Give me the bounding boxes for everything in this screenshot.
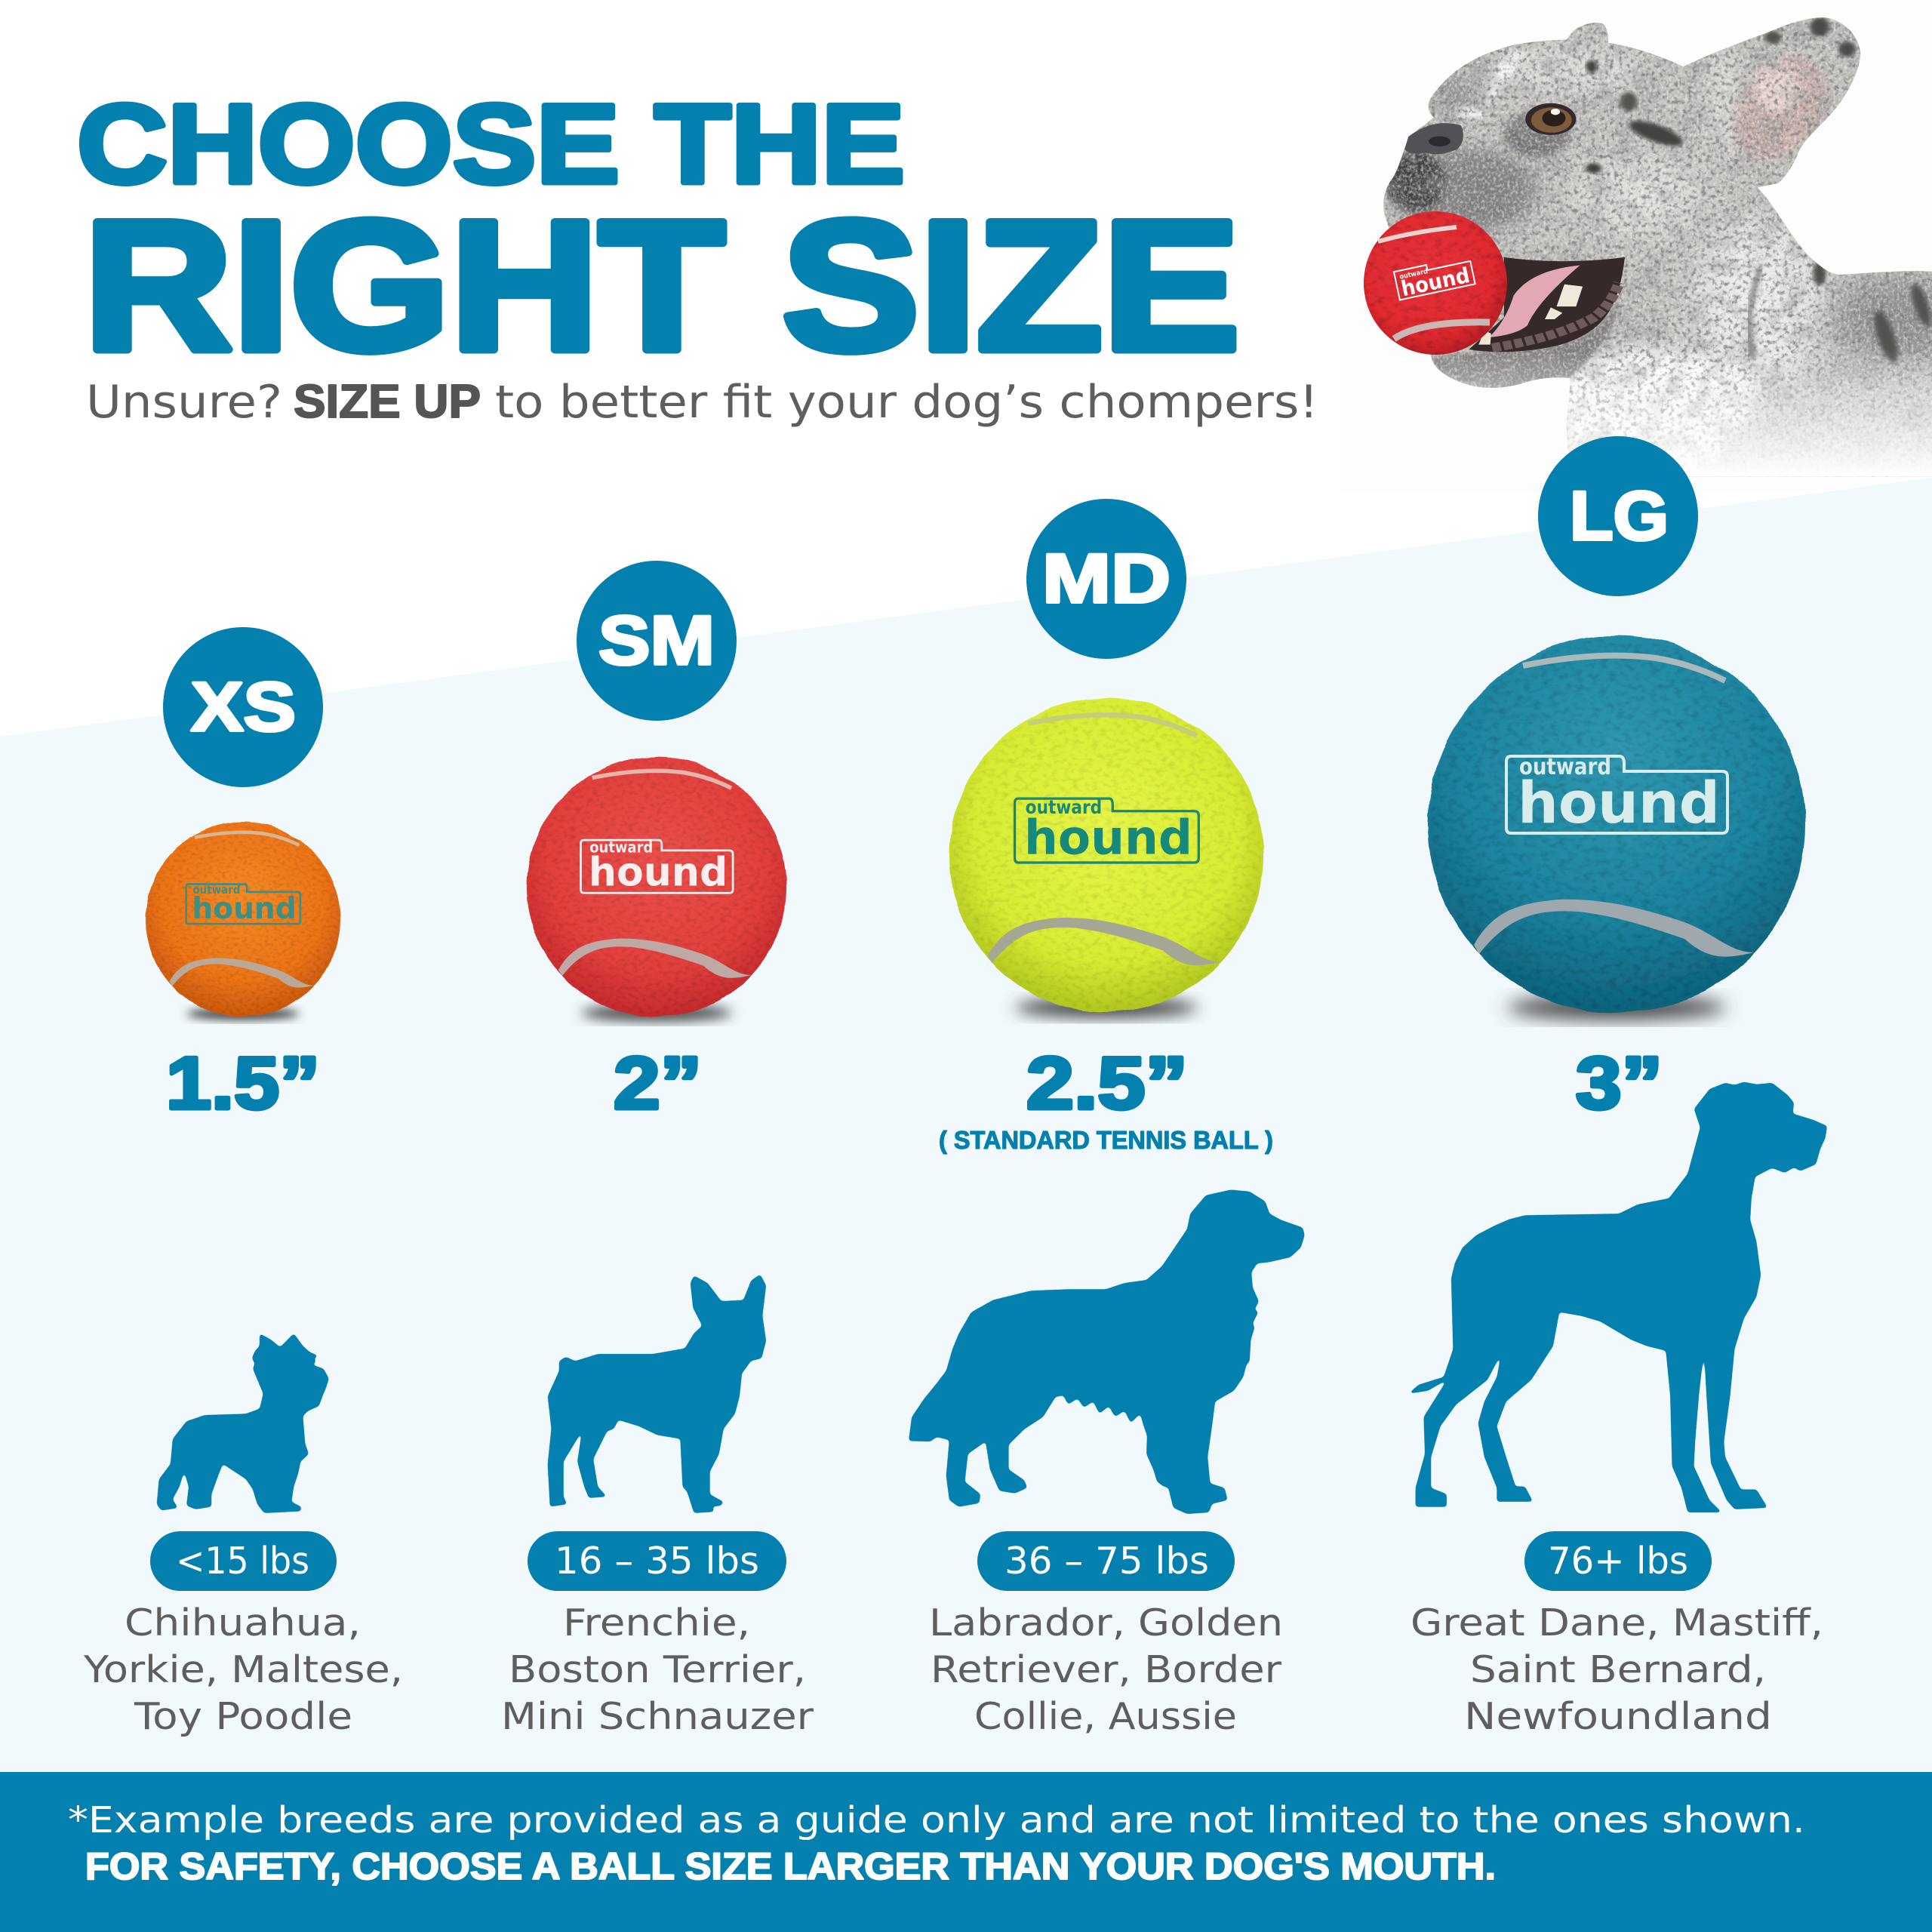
weight pill — [1524, 1531, 1712, 1591]
example breeds: Retriever, Border — [931, 1648, 1282, 1691]
size badge XS: XS — [191, 669, 296, 746]
subtitle: to better fit your dog’s chompers! — [495, 376, 1318, 429]
panel: LG — [1408, 436, 1827, 1738]
red ball in mouth: hound — [1399, 263, 1472, 301]
size badge LG: LG — [1570, 478, 1669, 555]
subtitle: SIZE UP — [294, 376, 481, 428]
red ball in mouth: outward — [1399, 268, 1429, 281]
yellow ball — [949, 698, 1263, 1017]
example breeds — [501, 1601, 814, 1738]
example breeds: Newfoundland — [1464, 1695, 1772, 1738]
example breeds — [1411, 1601, 1823, 1738]
orange ball: hound — [192, 892, 297, 926]
size badge SM — [577, 561, 737, 721]
example breeds: Frenchie, — [563, 1601, 750, 1644]
subtitle — [86, 376, 1318, 429]
size badge LG — [1538, 436, 1698, 596]
example breeds: Saint Bernard, — [1470, 1648, 1766, 1691]
photo: French bulldog holding red ball — [1360, 13, 1932, 480]
example breeds: Yorkie, Maltese, — [83, 1648, 403, 1691]
ball diameter: 1.5” — [166, 1041, 320, 1124]
teal ball: outward — [1519, 754, 1611, 780]
golden retriever silhouette — [909, 1189, 1305, 1514]
heading line 2: RIGHT SIZE — [84, 182, 1240, 389]
frenchie silhouette — [548, 1274, 766, 1513]
weight pill: <15 lbs — [176, 1540, 309, 1583]
example breeds: Great Dane, Mastiff, — [1411, 1601, 1823, 1644]
example breeds: Collie, Aussie — [974, 1695, 1237, 1738]
size badge SM: SM — [598, 602, 715, 679]
weight pill — [150, 1531, 337, 1591]
panel: MD — [909, 499, 1305, 1738]
dog nose — [1404, 123, 1463, 154]
teal ball: hound — [1518, 769, 1720, 836]
orange ball — [146, 822, 340, 1020]
ball diameter: 2” — [614, 1041, 702, 1124]
yellow ball: hound — [1024, 809, 1192, 865]
red ball in mouth — [1364, 211, 1507, 355]
weight pill: 76+ lbs — [1548, 1540, 1688, 1583]
size badge XS — [163, 627, 323, 787]
ball diameter: 3” — [1576, 1041, 1663, 1124]
size badge MD — [1026, 499, 1186, 659]
size badge MD: MD — [1042, 540, 1171, 617]
dog eye — [1525, 103, 1576, 135]
example breeds — [83, 1601, 403, 1738]
weight pill: 16 – 35 lbs — [555, 1540, 759, 1583]
standard tennis ball note: ( STANDARD TENNIS BALL ) — [939, 1126, 1273, 1154]
example breeds: Toy Poodle — [134, 1695, 352, 1738]
weight pill — [528, 1531, 786, 1591]
teal ball — [1428, 635, 1805, 1020]
footnote: *Example breeds are provided as a guide only and are not limited to the ones shown. — [68, 1799, 1805, 1841]
red ball: outward — [589, 838, 653, 857]
weight pill: 36 – 75 lbs — [1004, 1540, 1209, 1583]
example breeds: Boston Terrier, — [509, 1648, 806, 1691]
example breeds: Chihuahua, — [125, 1601, 361, 1644]
heading line 1: CHOOSE THE — [77, 81, 905, 207]
ball diameter: 2.5” — [1026, 1041, 1188, 1124]
yellow ball: outward — [1026, 796, 1102, 818]
title — [77, 81, 1240, 389]
example breeds — [929, 1601, 1283, 1738]
panel: XS — [83, 627, 403, 1738]
red ball — [527, 757, 786, 1021]
safety warning: FOR SAFETY, CHOOSE A BALL SIZE LARGER THAN YOUR DOG'S MOUTH. — [85, 1845, 1496, 1887]
great dane silhouette — [1408, 1081, 1827, 1512]
footer band — [0, 1772, 1932, 1932]
orange ball: outward — [192, 883, 240, 897]
example breeds: Labrador, Golden — [929, 1601, 1283, 1644]
dog lower lip — [1432, 302, 1619, 389]
yorkie silhouette — [157, 1334, 329, 1513]
dog mouth — [1469, 257, 1625, 352]
example breeds: Mini Schnauzer — [501, 1695, 814, 1738]
red ball: hound — [589, 850, 728, 896]
weight pill — [977, 1531, 1235, 1591]
subtitle: Unsure? — [86, 376, 282, 429]
panel: SM — [501, 561, 814, 1738]
